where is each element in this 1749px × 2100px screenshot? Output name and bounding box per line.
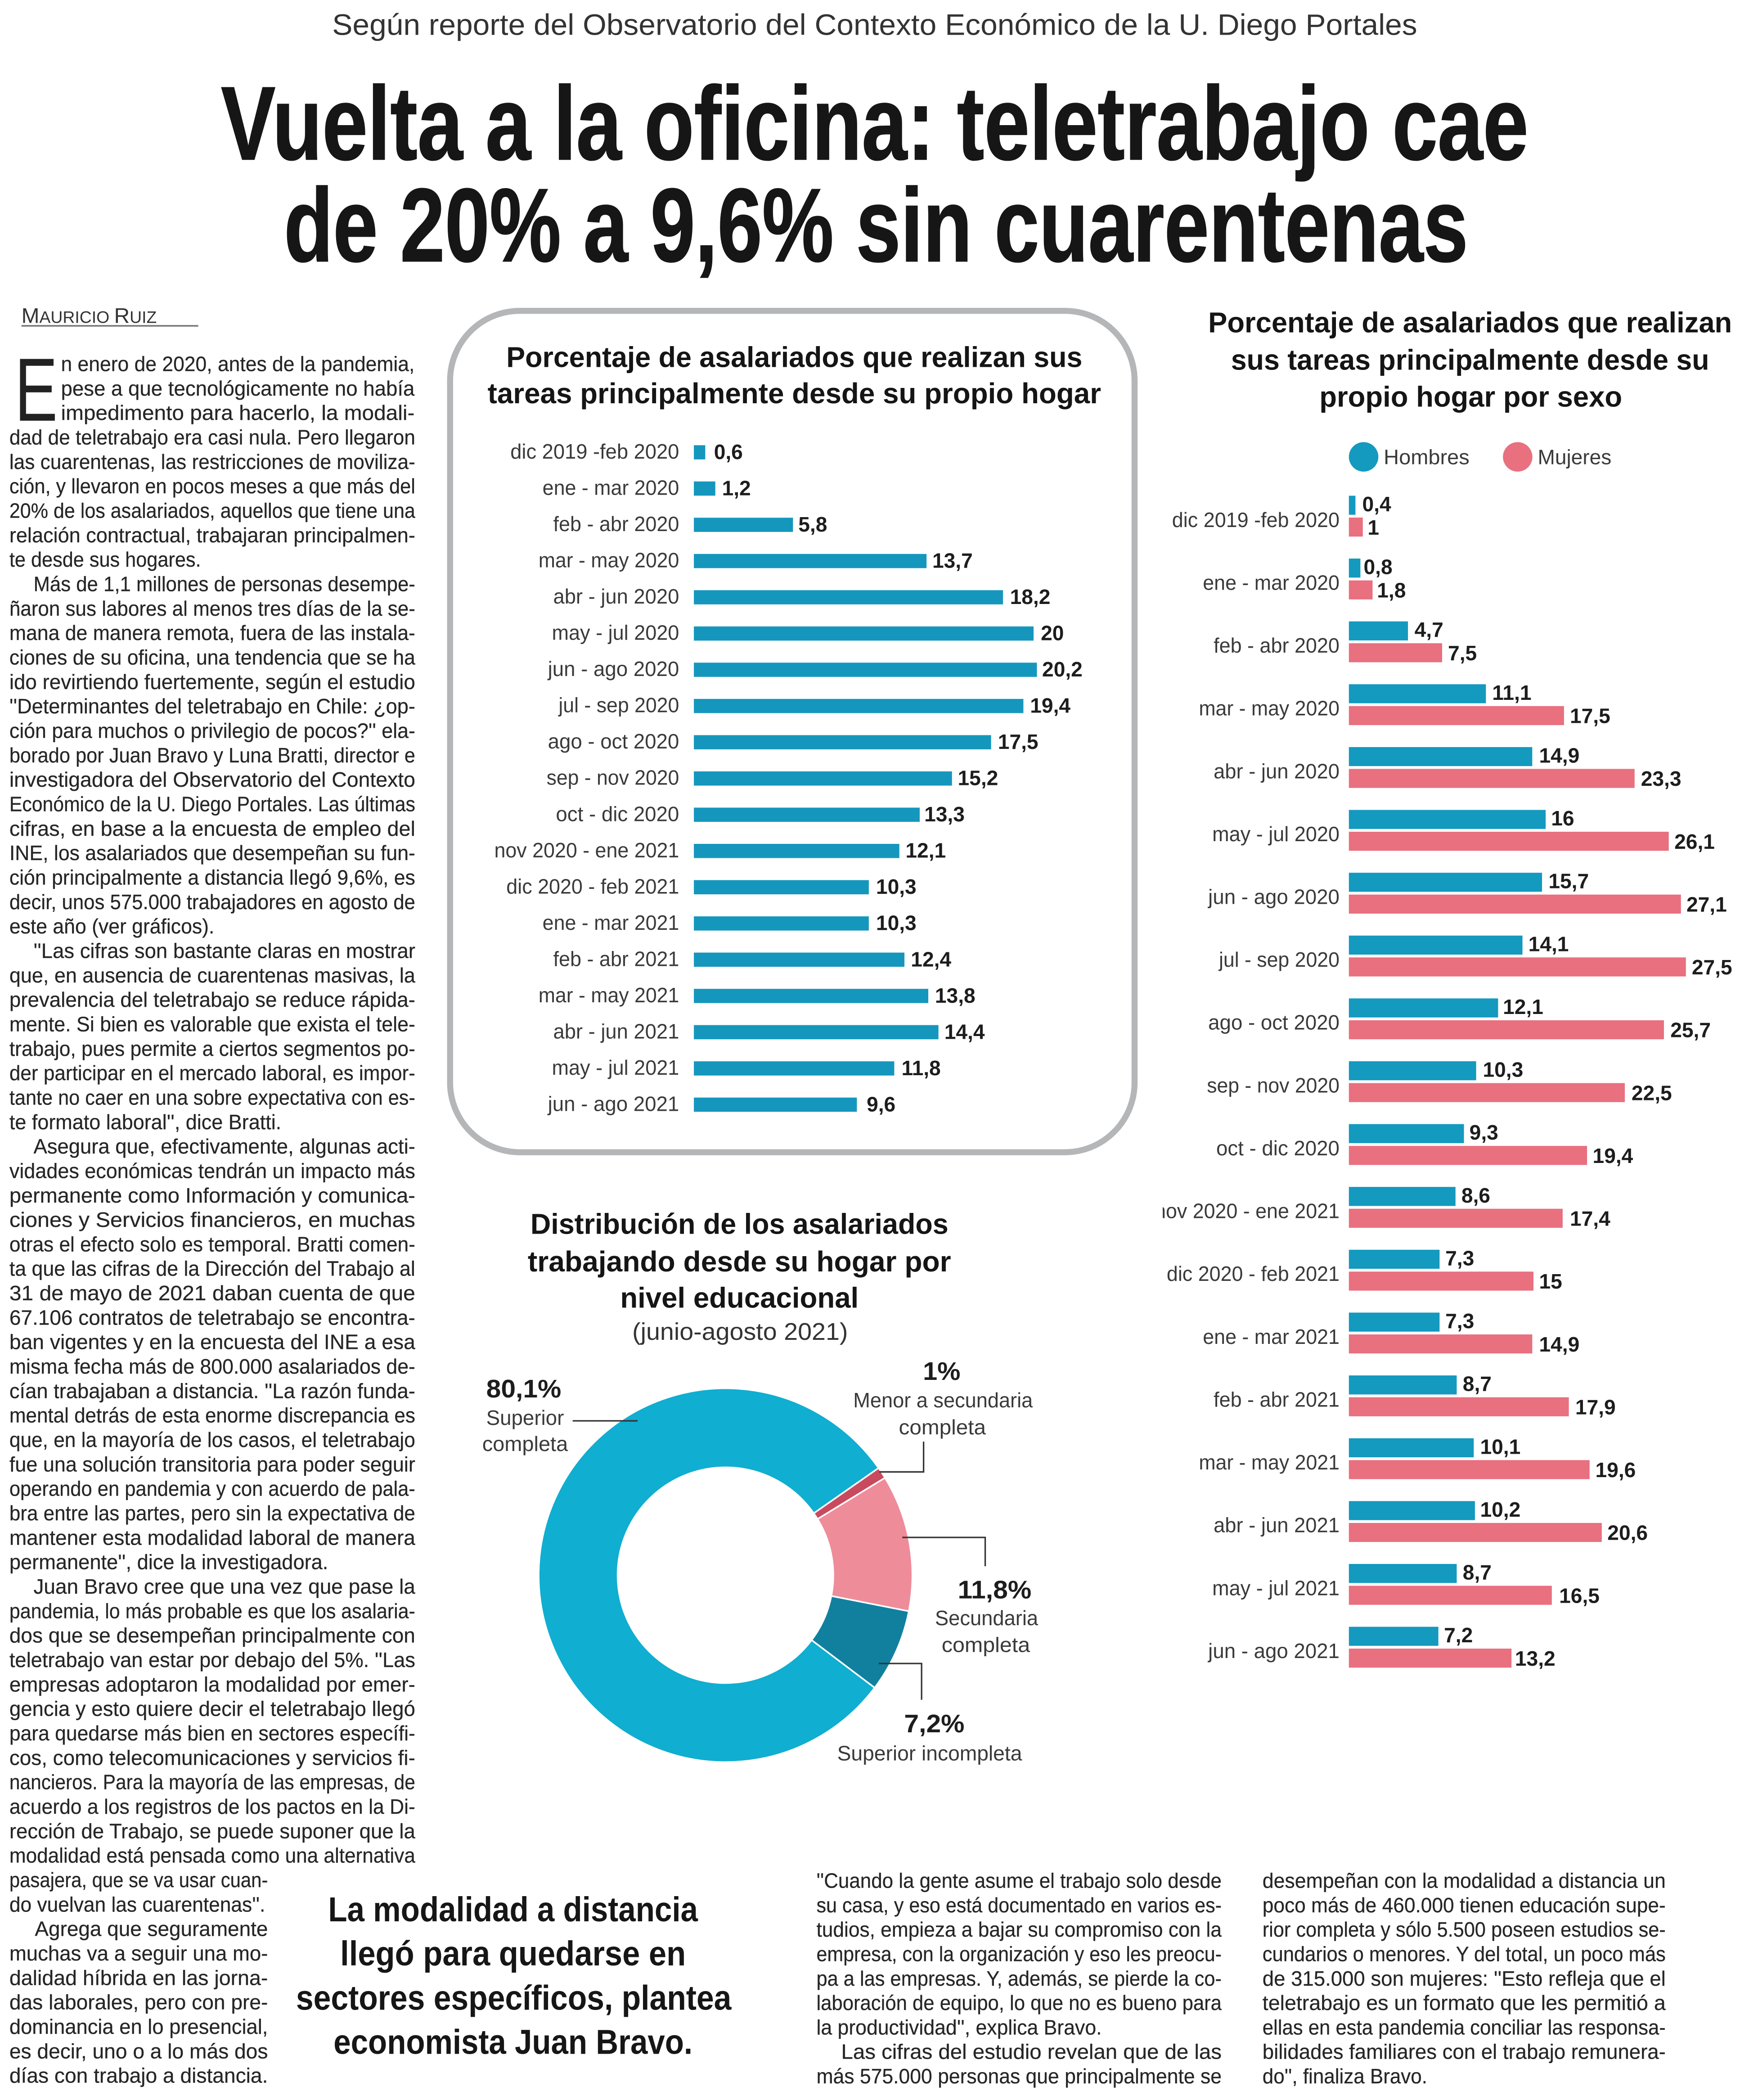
row ene-mar 2020: ene - mar 2020	[543, 476, 679, 500]
row ene-mar 2021	[1203, 1309, 1579, 1356]
article column 1: do vuelvan las cuarentenas''.	[9, 1893, 265, 1916]
row mar-may 2020: mar - may 2020	[1199, 697, 1340, 720]
row abr-jun 2020	[1214, 744, 1682, 790]
article column 1: las cuarentenas, las restricciones de moviliza-	[9, 450, 415, 473]
row ago-oct 2020	[1208, 995, 1711, 1042]
article column 3	[816, 1869, 1222, 2088]
row ago-oct 2020: 25,7	[1670, 1018, 1711, 1042]
row may-jul 2021: 11,8	[901, 1056, 941, 1080]
label: superior incompleta: 7,2%	[904, 1709, 964, 1738]
article column 4: poco más de 460.000 tienen educación supe-	[1263, 1893, 1666, 1917]
article column 1: Económico de la U. Diego Portales. Las últimas	[9, 793, 415, 816]
donut heading: trabajando desde su hogar por	[528, 1245, 951, 1278]
article column 4: teletrabajo es un formato que les permitió a	[1263, 1991, 1666, 2014]
row abr-jun 2020: 23,3	[1641, 767, 1682, 790]
row ago-oct 2020: ago - oct 2020	[548, 730, 679, 753]
row feb-abr 2021	[1214, 1372, 1616, 1419]
article column 1: operando en pandemia y con acuerdo de pala-	[9, 1477, 415, 1501]
row nov 2020-ene 2021: nov 2020 - ene 2021	[495, 838, 679, 862]
row ago-oct 2020: ago - oct 2020	[1208, 1011, 1340, 1034]
article column 1: para quedarse más bien en sectores específi-	[9, 1721, 415, 1745]
row nov 2020-ene 2021: 17,4	[1570, 1207, 1610, 1230]
label: menor a secundaria: Menor a secundaria	[853, 1388, 1033, 1412]
row abr-jun 2021: 20,6	[1607, 1521, 1648, 1545]
article column 1: pasajera, que se va usar cuan-	[9, 1868, 268, 1892]
article column 3: la productividad'', explica Bravo.	[816, 2015, 1102, 2039]
row jun-ago 2021	[547, 1092, 895, 1116]
row nov 2020-ene 2021: 12,1	[905, 839, 946, 862]
row mar-may 2021: mar - may 2021	[539, 983, 679, 1007]
article column 1: relación contractual, trabajaran principalmen-	[9, 523, 415, 547]
row abr-jun 2021	[553, 1019, 985, 1043]
row mar-may 2021: 13,8	[935, 984, 976, 1007]
row feb-abr 2021: 12,4	[911, 947, 951, 971]
row may-jul 2020: may - jul 2020	[1212, 822, 1340, 846]
row jul-sep 2020: 19,4	[1030, 694, 1070, 717]
article column 1: cos, como telecomunicaciones y servicios fi-	[9, 1746, 415, 1769]
label: menor a secundaria: completa	[899, 1415, 986, 1439]
row jun-ago 2021: jun - ago 2021	[1207, 1639, 1340, 1663]
row oct-dic 2020	[1216, 1121, 1633, 1167]
row mar-may 2020: mar - may 2020	[539, 549, 679, 572]
panel heading: Porcentaje de asalariados que realizan sus	[506, 341, 1082, 374]
row may-jul 2021	[1212, 1560, 1600, 1607]
article column 1: das laborales, pero con pre-	[9, 1991, 268, 2014]
label: superior completa: 80,1%	[486, 1374, 561, 1403]
article column 1: ''Las cifras son bastante claras en mostrar	[33, 939, 415, 962]
row dic 2020-feb 2021: 15	[1539, 1270, 1562, 1293]
row may-jul 2021: 8,7	[1463, 1560, 1492, 1584]
article column 1: mantener esta modalidad laboral de manera	[9, 1526, 415, 1549]
label: superior incompleta	[837, 1709, 1022, 1765]
row dic 2019-feb 2020: dic 2019 -feb 2020	[1172, 508, 1340, 532]
panel: overall bar chart	[450, 311, 1134, 1152]
article column 1: ban vigentes y en la encuesta del INE a esa	[9, 1330, 415, 1354]
row sep-nov 2020: sep - nov 2020	[547, 766, 679, 789]
row may-jul 2021: 16,5	[1559, 1584, 1600, 1607]
row may-jul 2020: 20	[1041, 622, 1064, 645]
legend	[1349, 442, 1611, 472]
row oct-dic 2020: oct - dic 2020	[556, 802, 679, 825]
article column 1: bra entre las partes, pero sin la expectativa de	[9, 1501, 415, 1525]
article column 1: Agrega que seguramente	[35, 1917, 268, 1941]
article column 4: do'', finaliza Bravo.	[1263, 2064, 1427, 2088]
article column 1: dad de teletrabajo era casi nula. Pero llegaron	[9, 426, 415, 449]
article column 1: Juan Bravo cree que una vez que pase la	[33, 1575, 415, 1598]
row sep-nov 2020	[1207, 1058, 1672, 1104]
row abr-jun 2021: abr - jun 2021	[1214, 1514, 1340, 1537]
label: menor a secundaria: 1%	[923, 1357, 960, 1385]
row jun-ago 2021: 9,6	[867, 1092, 895, 1116]
article column 1: te formato laboral'', dice Bratti.	[9, 1110, 281, 1134]
article column 1: otras el efecto solo es temporal. Bratti comen-	[9, 1232, 415, 1256]
row may-jul 2020	[552, 621, 1064, 645]
row feb-abr 2021	[553, 947, 951, 971]
label: superior completa: completa	[482, 1432, 568, 1456]
row sep-nov 2020	[547, 766, 998, 790]
article column 1: días con trabajo a distancia.	[9, 2064, 268, 2087]
row abr-jun 2020: abr - jun 2020	[553, 585, 679, 608]
row dic 2019-feb 2020: 1	[1367, 516, 1379, 539]
article column 1: borado por Juan Bravo y Luna Bratti, director e	[9, 744, 415, 767]
panel: donut chart	[482, 1208, 1038, 1765]
row nov 2020-ene 2021: nov 2020 - ene 2021	[1155, 1199, 1340, 1223]
row feb-abr 2021: feb - abr 2021	[553, 947, 679, 970]
row mar-may 2020: 11,1	[1492, 681, 1532, 704]
article column 1: cían trabajaban a distancia. ''La razón funda-	[9, 1379, 415, 1402]
row may-jul 2021	[552, 1056, 941, 1080]
row feb-abr 2021: feb - abr 2021	[1214, 1388, 1340, 1411]
article column 4: rior completa y sólo 5.500 poseen estudios se-	[1263, 1918, 1666, 1941]
row feb-abr 2020: feb - abr 2020	[553, 512, 679, 536]
row dic 2019-feb 2020: dic 2019 -feb 2020	[510, 440, 679, 463]
pull quote	[296, 1890, 732, 2062]
row ene-mar 2021: 10,3	[876, 911, 917, 935]
row feb-abr 2021: 17,9	[1575, 1395, 1616, 1419]
row dic 2020-feb 2021: dic 2020 - feb 2021	[1167, 1262, 1340, 1285]
article column 1: vidades económicas tendrán un impacto más	[9, 1159, 415, 1182]
row jun-ago 2020: 20,2	[1042, 658, 1083, 681]
article column 1: ido revirtiendo fuertemente, según el estudio	[9, 670, 415, 694]
row ene-mar 2020: 1,8	[1377, 578, 1406, 602]
article column 1: trabajo, pues permite a ciertos segmentos po-	[9, 1037, 415, 1060]
article column 1: mental detrás de esta enorme discrepancia es	[9, 1404, 415, 1427]
article column 3: ''Cuando la gente asume el trabajo solo desde	[816, 1869, 1222, 1892]
heading: propio hogar por sexo	[1319, 380, 1622, 413]
donut segments	[539, 1388, 913, 1762]
article column 4: ellas en esta pandemia conciliar las responsa-	[1263, 2015, 1666, 2039]
row jun-ago 2020	[547, 657, 1083, 681]
article column 1: que, en ausencia de cuarentenas masivas, la	[9, 964, 415, 987]
article column 1: pese a que tecnológicamente no había	[61, 377, 415, 400]
row ene-mar 2020: 1,2	[722, 476, 751, 500]
article column 1: cifras, en base a la encuesta de empleo del	[9, 817, 415, 840]
article column 1: 31 de mayo de 2021 daban cuenta de que	[9, 1281, 415, 1305]
row dic 2020-feb 2021: 10,3	[876, 875, 917, 898]
heading	[1208, 306, 1732, 413]
row dic 2020-feb 2021: dic 2020 - feb 2021	[506, 874, 679, 898]
article column 1: n enero de 2020, antes de la pandemia,	[61, 352, 414, 376]
row dic 2020-feb 2021: 7,3	[1445, 1246, 1474, 1270]
article column 3: laboración de equipo, lo que no es bueno para	[816, 1991, 1222, 2014]
row abr-jun 2021	[1214, 1498, 1648, 1545]
row abr-jun 2020: 18,2	[1010, 585, 1050, 608]
row mar-may 2021	[1199, 1435, 1636, 1482]
row abr-jun 2021: abr - jun 2021	[553, 1019, 679, 1043]
article column 1	[9, 340, 415, 2087]
article column 1: ción, y llevaron en pocos meses a que más del	[9, 474, 415, 498]
article column 1: ciones de su oficina, una tendencia que se ha	[9, 646, 415, 669]
drop cap: E	[15, 340, 58, 440]
row mar-may 2020	[539, 549, 973, 572]
row mar-may 2020: 17,5	[1570, 704, 1610, 728]
panel: bar chart by sex	[1145, 306, 1732, 1670]
article column 3: empresa, con la organización y eso les preocu-	[816, 1942, 1222, 1965]
label: superior completa	[482, 1374, 568, 1456]
article column 1: ta que las cifras de la Dirección del Trabajo al	[9, 1257, 415, 1280]
article column 1: mente. Si bien es valorable que exista el tele-	[9, 1012, 415, 1036]
row ene-mar 2021: ene - mar 2021	[543, 911, 679, 934]
article column 1: es decir, uno o a lo más dos	[9, 2039, 268, 2063]
kicker: Según reporte del Observatorio del Contexto Económico de la U. Diego Portales	[332, 8, 1417, 41]
row abr-jun 2020	[553, 585, 1050, 608]
article column 1: investigadora del Observatorio del Contexto	[9, 768, 415, 791]
article column 1: prevalencia del teletrabajo se reduce rápida-	[9, 988, 415, 1011]
row jun-ago 2021: jun - ago 2021	[547, 1092, 679, 1115]
article column 1: nancieros. Para la mayoría de las empresas, de	[9, 1771, 415, 1794]
row jun-ago 2020: jun - ago 2020	[547, 657, 679, 680]
row feb-abr 2020: 4,7	[1415, 618, 1443, 641]
row sep-nov 2020: 10,3	[1483, 1058, 1523, 1082]
row dic 2020-feb 2021	[506, 874, 917, 898]
row feb-abr 2020: 7,5	[1448, 641, 1477, 665]
donut heading: (junio-agosto 2021)	[632, 1318, 848, 1345]
row oct-dic 2020: oct - dic 2020	[1216, 1136, 1340, 1160]
heading: Porcentaje de asalariados que realizan	[1208, 306, 1732, 338]
article column 1: modalidad está pensada como una alternativa	[9, 1844, 415, 1867]
article column 1: misma fecha más de 800.000 asalariados de-	[9, 1355, 415, 1378]
byline: MAURICIO RUIZ	[22, 304, 157, 328]
legend: Hombres	[1384, 445, 1470, 469]
article column 1: dominancia en lo presencial,	[9, 2015, 268, 2038]
title	[221, 65, 1529, 284]
row jul-sep 2020	[558, 694, 1070, 717]
label: secundaria completa: Secundaria	[935, 1606, 1038, 1630]
article column 1: empresas adoptaron la modalidad por emer-	[9, 1672, 415, 1696]
article column 1: decir, unos 575.000 trabajadores en agosto de	[9, 890, 415, 914]
row feb-abr 2020	[1214, 618, 1477, 665]
row mar-may 2021: mar - may 2021	[1199, 1451, 1340, 1474]
heading: sus tareas principalmente desde su	[1231, 344, 1709, 376]
article column 1: INE, los asalariados que desempeñan su fun-	[9, 841, 415, 865]
pull quote: economista Juan Bravo.	[333, 2023, 692, 2062]
row jul-sep 2020: 14,1	[1529, 932, 1569, 955]
row ene-mar 2021: ene - mar 2021	[1203, 1325, 1340, 1348]
row jun-ago 2021: 13,2	[1515, 1647, 1556, 1670]
pull quote: La modalidad a distancia	[328, 1890, 698, 1929]
article column 1: dos que se desempeñan principalmente con	[9, 1624, 415, 1647]
article column 1: ''Determinantes del teletrabajo en Chile: ¿op-	[9, 694, 415, 718]
row ago-oct 2020	[548, 730, 1039, 753]
donut heading: Distribución de los asalariados	[531, 1208, 949, 1240]
row dic 2019-feb 2020: 0,4	[1362, 492, 1391, 516]
donut heading	[528, 1208, 951, 1345]
row ene-mar 2020	[1203, 555, 1406, 602]
row mar-may 2021: 19,6	[1596, 1458, 1636, 1482]
article column 1: Más de 1,1 millones de personas desempe-	[33, 572, 415, 596]
article column 1: ción principalmente a distancia llegó 9,6%, es	[9, 866, 415, 889]
row jun-ago 2020: 27,1	[1686, 892, 1727, 916]
row oct-dic 2020	[556, 802, 965, 826]
article column 4: de 315.000 son mujeres: ''Esto refleja que el	[1263, 1967, 1666, 1990]
article column 1: ción para muchos o privilegio de pocos?'' ela-	[9, 719, 415, 743]
row dic 2020-feb 2021	[1167, 1246, 1562, 1293]
row may-jul 2020: 16	[1551, 807, 1574, 830]
article column 1: rección de Trabajo, se puede suponer que la	[9, 1819, 415, 1843]
row oct-dic 2020: 13,3	[924, 802, 965, 826]
row mar-may 2021: 10,1	[1480, 1435, 1520, 1458]
panel heading: tareas principalmente desde su propio hogar	[488, 377, 1101, 410]
article column 4	[1263, 1869, 1666, 2088]
article column 1: acuerdo a los registros de los pactos en la Di-	[9, 1795, 415, 1818]
article column 1: dalidad híbrida en las jorna-	[9, 1966, 268, 1989]
donut heading: nivel educacional	[620, 1281, 859, 1314]
row ene-mar 2021: 14,9	[1539, 1333, 1579, 1356]
article column 1: ñaron sus labores al menos tres días de la se-	[9, 597, 415, 620]
row dic 2019-feb 2020	[1172, 492, 1391, 539]
row abr-jun 2020: abr - jun 2020	[1214, 759, 1340, 783]
row ene-mar 2021	[543, 911, 917, 935]
row oct-dic 2020: 19,4	[1593, 1144, 1633, 1167]
row feb-abr 2021: 8,7	[1463, 1372, 1492, 1396]
row jul-sep 2020	[1218, 932, 1732, 979]
row may-jul 2021: may - jul 2021	[552, 1056, 679, 1079]
row ene-mar 2020	[543, 476, 751, 500]
article column 1: impedimento para hacerlo, la modali-	[61, 401, 414, 424]
row may-jul 2020	[1212, 807, 1715, 853]
row mar-may 2020: 13,7	[932, 549, 973, 572]
article column 1: 20% de los asalariados, aquellos que tiene una	[9, 499, 415, 523]
article column 1: tante no caer en una sobre expectativa con es-	[9, 1086, 415, 1109]
article column 1: permanente'', dice la investigadora.	[9, 1550, 328, 1574]
label: secundaria completa: completa	[942, 1633, 1030, 1657]
article column 3: tudios, empieza a bajar su compromiso con la	[816, 1918, 1222, 1941]
row jun-ago 2020: 15,7	[1548, 870, 1589, 893]
row mar-may 2020	[1199, 681, 1610, 728]
pull quote: llegó para quedarse en	[340, 1934, 686, 1973]
article column 4: desempeñan con la modalidad a distancia un	[1263, 1869, 1666, 1892]
article column 4: cundarios o menores. Y del total, un poco más	[1263, 1942, 1666, 1965]
article column 1: pandemia, lo más probable es que los asalaria-	[9, 1599, 415, 1622]
row may-jul 2020: may - jul 2020	[552, 621, 679, 644]
row nov 2020-ene 2021: 8,6	[1461, 1184, 1490, 1207]
row oct-dic 2020: 9,3	[1470, 1121, 1498, 1144]
article column 1: este año (ver gráficos).	[9, 915, 214, 938]
row feb-abr 2020	[553, 512, 827, 536]
article column 3: su casa, y eso está documentado en varios es-	[816, 1893, 1222, 1917]
row jul-sep 2020: jul - sep 2020	[558, 694, 679, 717]
article column 1: teletrabajo van estar por debajo del 5%. ''Las	[9, 1648, 415, 1672]
row feb-abr 2020: feb - abr 2020	[1214, 634, 1340, 657]
row may-jul 2021: may - jul 2021	[1212, 1576, 1340, 1600]
article column 3: Las cifras del estudio revelan que de las	[841, 2040, 1222, 2064]
article column 1: 67.106 contratos de teletrabajo se encontra-	[9, 1306, 415, 1329]
article column 1: que, en la mayoría de los casos, el teletrabajo	[9, 1428, 415, 1451]
row ene-mar 2021: 7,3	[1445, 1309, 1474, 1333]
row jun-ago 2020	[1207, 870, 1727, 916]
article column 4: bilidades familiares con el trabajo remunera-	[1263, 2040, 1666, 2064]
row jul-sep 2020: 27,5	[1692, 955, 1732, 979]
legend: Mujeres	[1538, 445, 1611, 469]
row dic 2019-feb 2020: 0,6	[714, 440, 743, 464]
row ene-mar 2020: ene - mar 2020	[1203, 571, 1340, 594]
row sep-nov 2020: sep - nov 2020	[1207, 1073, 1340, 1097]
panel frame	[450, 311, 1134, 1152]
row jun-ago 2021: 7,2	[1444, 1623, 1473, 1647]
row jul-sep 2020: jul - sep 2020	[1218, 948, 1340, 971]
label: menor a secundaria	[853, 1357, 1033, 1439]
article column 1: ciones y Servicios financieros, en muchas	[9, 1208, 415, 1231]
article column 1: Asegura que, efectivamente, algunas acti-	[33, 1135, 415, 1158]
article column 1: gencia y esto quiere decir el teletrabajo llegó	[9, 1697, 415, 1721]
row ago-oct 2020: 17,5	[998, 730, 1039, 753]
article column 3: más 575.000 personas que principalmente se	[816, 2064, 1222, 2088]
article column 1: permanente como Información y comunica-	[9, 1184, 415, 1207]
row ene-mar 2020: 0,8	[1364, 555, 1393, 579]
article column 1: muchas va a seguir una mo-	[9, 1942, 268, 1965]
row nov 2020-ene 2021	[495, 838, 946, 862]
leader lines	[573, 1421, 985, 1700]
label: secundaria completa: 11,8%	[958, 1575, 1031, 1604]
panel heading	[488, 341, 1101, 410]
row jun-ago 2020: jun - ago 2020	[1207, 885, 1340, 909]
row ago-oct 2020: 12,1	[1503, 995, 1543, 1018]
article column 3: pa a las empresas. Y, además, se pierde la co-	[816, 1967, 1222, 1990]
row abr-jun 2021: 14,4	[944, 1020, 985, 1043]
article column 1: der participar en el mercado laboral, es impor-	[9, 1061, 415, 1085]
row feb-abr 2020: 5,8	[798, 513, 827, 536]
pull quote: sectores específicos, plantea	[296, 1978, 732, 2017]
row sep-nov 2020: 15,2	[958, 766, 998, 790]
label: secundaria completa	[935, 1575, 1038, 1657]
article column 1: te desde sus hogares.	[9, 548, 201, 571]
row mar-may 2021	[539, 983, 976, 1007]
article column 1: mana de manera remota, fuera de las instala-	[9, 621, 415, 644]
article column 1: fue una solución transitoria para poder seguir	[9, 1452, 415, 1476]
row nov 2020-ene 2021	[1155, 1184, 1610, 1230]
row abr-jun 2020: 14,9	[1539, 744, 1579, 767]
row may-jul 2020: 26,1	[1674, 830, 1715, 853]
label: superior completa: Superior	[486, 1406, 564, 1429]
row jun-ago 2021	[1207, 1623, 1556, 1670]
label: superior incompleta: Superior incompleta	[837, 1742, 1022, 1765]
row abr-jun 2021: 10,2	[1480, 1498, 1520, 1521]
row sep-nov 2020: 22,5	[1632, 1081, 1672, 1104]
